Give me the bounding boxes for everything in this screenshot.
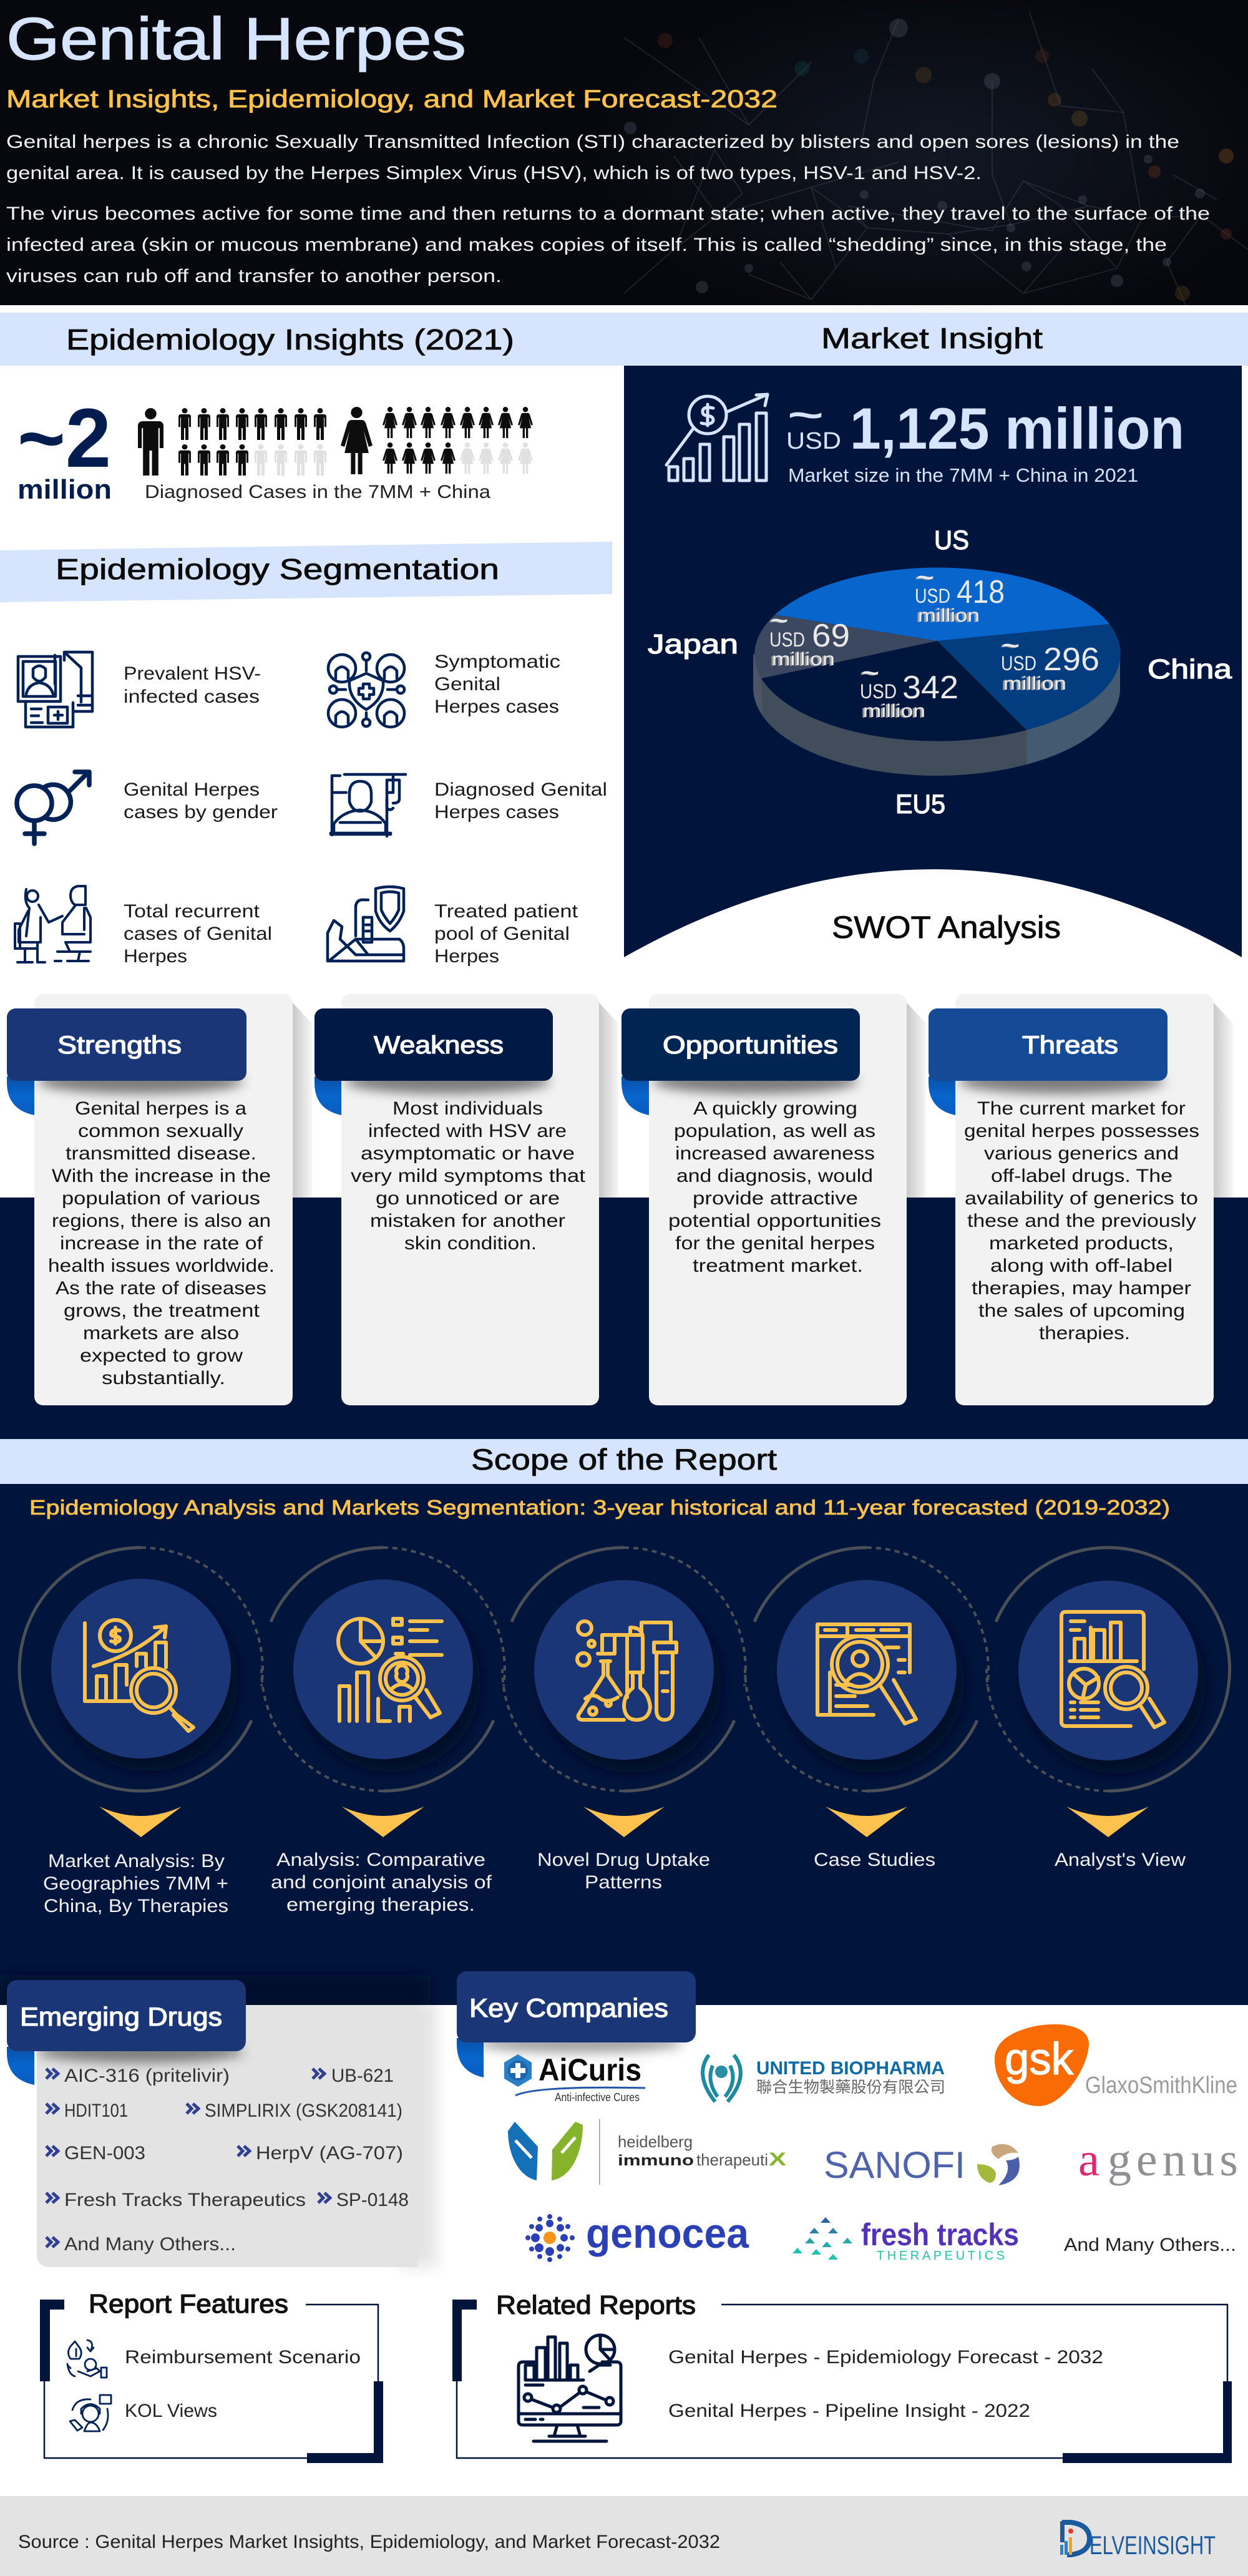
body text: markets are also: [83, 1323, 239, 1344]
header panel: [0, 0, 1248, 331]
panel: related reports: [452, 2290, 1232, 2463]
label: Herpes: [124, 946, 187, 967]
card: strengths: [7, 994, 312, 1405]
label: Prevalent HSV-: [124, 663, 261, 684]
logo: AiCuris: [504, 2052, 645, 2104]
chevron: [1066, 1807, 1149, 1837]
caption: Analysis: Comparative: [276, 1850, 485, 1870]
heading: epidemiology segmentation: Epidemiology Segmentation: [56, 553, 499, 585]
body text: [668, 1098, 881, 1276]
title: Genital Herpes: [6, 6, 466, 72]
icon: chart with magnifier: [85, 1620, 193, 1731]
card: weakness: [314, 994, 618, 1405]
pie label: China value: 296: [1043, 642, 1099, 678]
stat: 2 million diagnosed cases: [17, 392, 533, 505]
icon: patient documents: [18, 652, 92, 727]
label: Symptomatic: [434, 651, 560, 672]
panel: report features: [40, 2289, 383, 2463]
logo: Heidelberg Immuno Therapeutix: [508, 2119, 786, 2185]
logo: Fresh Tracks: fresh tracks: [861, 2217, 1019, 2252]
tab: [622, 1008, 860, 1081]
icon: lab flasks: [577, 1621, 676, 1720]
body text: Most individuals: [392, 1098, 543, 1119]
caption: Analyst's View: [1055, 1850, 1186, 1870]
body text: Genital herpes is a: [75, 1098, 246, 1119]
body text: [48, 1098, 275, 1388]
body text: population of various: [62, 1188, 260, 1209]
heading: Report Features: [89, 2289, 288, 2318]
drug list: GEN-003: [64, 2143, 145, 2164]
body text: With the increase in the: [52, 1166, 271, 1186]
body text: expected to grow: [80, 1345, 243, 1366]
drug list: And Many Others...: [64, 2234, 236, 2255]
body text: [351, 1098, 586, 1254]
body text: substantially.: [102, 1368, 225, 1388]
text: reimbursement scenario: Reimbursement Scenario: [125, 2347, 361, 2368]
region labels: [648, 525, 1232, 819]
region labels: US: [934, 525, 969, 555]
logo: Genocea: genocea: [586, 2210, 749, 2257]
market size value: ~: [787, 394, 824, 437]
heading: Related Reports: [496, 2290, 696, 2320]
segmentation item: prevalent: [18, 652, 261, 727]
body text: grows, the treatment: [64, 1300, 260, 1321]
market size caption: Market size in the 7MM + China in 2021: [788, 464, 1138, 486]
body text: health issues worldwide.: [48, 1256, 275, 1276]
card: threats: [929, 994, 1233, 1405]
logo: Heidelberg Immuno Therapeutix: therapeuti: [696, 2150, 768, 2169]
logo: GSK: [995, 2024, 1237, 2106]
label: infected cases: [124, 686, 260, 707]
intro paragraph 2: infected area (skin or mucous membrane) and makes copies of itself. This is called “shedding” since, in this stage, the: [6, 235, 1167, 255]
segmentation item: symptomatic: [328, 651, 560, 727]
pie chart: market size by region: [753, 565, 1121, 776]
caption: [537, 1850, 710, 1893]
panel: emerging drugs: [0, 1975, 437, 2267]
body text: mistaken for another: [370, 1211, 565, 1231]
icon: monitor analytics: [519, 2335, 621, 2441]
label: cases by gender: [124, 802, 278, 822]
intro paragraph 1: [6, 132, 1179, 183]
label: cases of Genital: [124, 924, 272, 944]
body text: The current market for: [977, 1098, 1186, 1119]
label: Genital Herpes: [124, 779, 260, 800]
pie label: Japan value: 69: [812, 618, 850, 654]
body text: provide attractive: [693, 1188, 858, 1209]
body text: As the rate of diseases: [56, 1278, 266, 1299]
body text: regions, there is also an: [52, 1211, 271, 1231]
heading: market insight: Market Insight: [821, 322, 1043, 354]
drug list: SP-0148: [336, 2190, 409, 2210]
drug list: HDIT101: [64, 2100, 128, 2121]
segmentation item: gender: [17, 772, 278, 844]
caption: Case Studies: [814, 1850, 935, 1870]
logo: Heidelberg Immuno Therapeutix: immuno: [618, 2152, 694, 2169]
big number: ~2: [17, 392, 111, 485]
subtitle: Market Insights, Epidemiology, and Market Forecast-2032: [6, 85, 778, 113]
text: KOL views: KOL Views: [125, 2401, 217, 2421]
icon: tablet report: [1061, 1612, 1164, 1727]
caption: China, By Therapies: [44, 1896, 228, 1916]
scope item: comparative analysis: [261, 1548, 505, 1915]
pie label: US value: million: [918, 605, 980, 626]
logo: Fresh Tracks: THERAPEUTICS: [877, 2249, 1005, 2263]
logo: Heidelberg Immuno Therapeutix: heidelberg: [618, 2132, 693, 2151]
panel: key companies: [457, 1971, 1238, 2263]
tab: [929, 1008, 1168, 1081]
body text: various generics and: [984, 1143, 1179, 1164]
pie label: EU5 value: [860, 660, 958, 721]
heading: epidemiology insights: Epidemiology Insights (2021): [66, 323, 514, 356]
drug list: SIMPLIRIX (GSK208141): [205, 2100, 402, 2121]
tab label: Emerging Drugs: [20, 2002, 222, 2031]
icon: market growth: [666, 394, 768, 481]
caption: Novel Drug Uptake: [537, 1850, 710, 1870]
body text: off-label drugs. The: [991, 1166, 1172, 1186]
intro paragraph 2: viruses can rub off and transfer to another person.: [6, 266, 502, 286]
drug list: HerpV (AG-707): [256, 2143, 403, 2164]
tab label: Threats: [1022, 1032, 1118, 1059]
logo: Agenus: a: [1078, 2134, 1099, 2186]
icon: shield and people: [328, 653, 404, 727]
pie label: US value: [915, 565, 1005, 626]
chevron: [826, 1807, 907, 1837]
icon: gender symbols: [17, 772, 89, 844]
logo: United Biopharma: [703, 2055, 945, 2102]
pie label: US value: ~: [917, 565, 934, 591]
tab: [457, 1971, 696, 2042]
label: [124, 901, 272, 967]
panel: scope of the report: [0, 1439, 1248, 2005]
label: Herpes cases: [434, 802, 559, 822]
heading: scope of the report: Scope of the Report: [471, 1443, 777, 1476]
footer: [0, 2496, 1248, 2576]
caption: and conjoint analysis of: [271, 1872, 492, 1893]
pie label: China value: [1001, 633, 1099, 694]
body text: asymptomatic or have: [361, 1143, 575, 1164]
label: Diagnosed Genital: [434, 779, 607, 800]
pie label: Japan value: ~: [771, 608, 788, 634]
body text: increased awareness: [675, 1143, 875, 1164]
body text: common sexually: [78, 1121, 243, 1141]
caption: Geographies 7MM +: [43, 1873, 228, 1894]
card: opportunities: [622, 994, 926, 1405]
body text: along with off-label: [990, 1256, 1172, 1276]
label: [124, 779, 278, 822]
body text: genital herpes possesses: [964, 1121, 1199, 1141]
body text: treatment market.: [693, 1256, 863, 1276]
label: [124, 663, 261, 707]
section header band: epidemiology and market insight: [0, 313, 1248, 366]
tab label: Key Companies: [469, 1993, 668, 2022]
caption: Market Analysis: By: [48, 1851, 225, 1871]
icon: shield and reclining patient: [328, 887, 404, 961]
source text: Source : Genital Herpes Market Insights, Epidemiology, and Market Forecast-2032: [18, 2532, 720, 2552]
heading: SWOT analysis: SWOT Analysis: [832, 910, 1061, 945]
logo: Heidelberg Immuno Therapeutix: X: [769, 2149, 786, 2170]
pictogram: men: [138, 408, 326, 476]
label: Herpes: [434, 946, 499, 967]
body text: these and the previously: [967, 1211, 1196, 1231]
body text: very mild symptoms that: [351, 1166, 586, 1186]
body text: potential opportunities: [668, 1211, 881, 1231]
label: Genital: [434, 674, 500, 695]
body text: [964, 1098, 1199, 1344]
chevron: [99, 1807, 182, 1837]
subheading: forecast period: Epidemiology Analysis and Markets Segmentation: 3-year historical and 11-year forecasted (2019-2032): [29, 1496, 1170, 1519]
region labels: EU5: [895, 789, 945, 819]
tab label: Opportunities: [663, 1032, 838, 1059]
caption: emerging therapies.: [286, 1895, 475, 1915]
segmentation item: diagnosed: [331, 774, 607, 836]
region labels: Japan: [648, 629, 738, 660]
icon: doctor and patient: [15, 886, 90, 962]
tab: [7, 1008, 246, 1081]
text: related report 2: Genital Herpes - Pipeline Insight - 2022: [668, 2401, 1030, 2421]
label: Herpes cases: [434, 696, 559, 717]
panel: SWOT navy background: [0, 1198, 1248, 1439]
tab: [314, 1008, 553, 1081]
pie label: Japan value: million: [772, 649, 835, 670]
scope item: market analysis: [19, 1548, 263, 1916]
body text: population, as well as: [674, 1121, 875, 1141]
scope item: case studies: [745, 1548, 988, 1870]
pie label: US value: 418: [957, 574, 1005, 610]
logo: Sanofi: SANOFI: [824, 2144, 965, 2186]
logo: Genocea: [525, 2210, 749, 2262]
body text: infected with HSV are: [368, 1121, 567, 1141]
label: [434, 779, 607, 822]
text: related report 1: Genital Herpes - Epidemiology Forecast - 2032: [668, 2347, 1103, 2368]
body text: increase in the rate of: [60, 1233, 263, 1254]
scope item: analyst view: [987, 1548, 1230, 1870]
pie label: EU5 value: 342: [902, 670, 958, 706]
logo: AiCuris: Anti-infective Cures: [555, 2091, 640, 2104]
body text: skin condition.: [404, 1233, 537, 1254]
pie label: EU5 value: ~: [862, 660, 879, 686]
icon: KOL views: [70, 2395, 111, 2431]
icon: browser with magnifier: [817, 1624, 916, 1724]
segmentation item: treated: [328, 887, 578, 967]
body text: A quickly growing: [693, 1098, 857, 1119]
label: pool of Genital: [434, 924, 570, 944]
million label: million: [17, 474, 112, 505]
body text: for the genital herpes: [675, 1233, 875, 1254]
body text: and diagnosis, would: [676, 1166, 873, 1186]
market size value: USD: [786, 428, 841, 454]
pie label: US value: USD: [915, 585, 950, 607]
caption: [271, 1850, 492, 1915]
drug list: UB-621: [331, 2066, 394, 2086]
logo: DelveInsight: [1060, 2521, 1216, 2560]
market size value: 1,125 million: [850, 396, 1184, 461]
intro paragraph 2: [6, 203, 1210, 286]
drug list: [46, 2066, 409, 2255]
label: [434, 901, 578, 967]
region labels: China: [1148, 654, 1232, 685]
scope item: novel drug uptake: [502, 1548, 746, 1893]
icon: pie and bars with magnifier: [338, 1619, 442, 1721]
logo: AiCuris: AiCuris: [539, 2052, 641, 2087]
pie label: China value: USD: [1001, 652, 1036, 675]
pictogram: women: [341, 407, 533, 474]
icon: patient in bed: [331, 774, 406, 836]
body text: availability of generics to: [965, 1188, 1198, 1209]
label: Total recurrent: [124, 901, 260, 922]
intro paragraph 1: Genital herpes is a chronic Sexually Transmitted Infection (STI) characterized by blisters and open sores (lesions) in the: [6, 132, 1179, 152]
chevron: [342, 1807, 424, 1837]
heading: epidemiology segmentation: [0, 542, 612, 602]
logo: Fresh Tracks: [792, 2217, 1019, 2263]
intro paragraph 1: genital area. It is caused by the Herpes Simplex Virus (HSV), which is of two types, HSV-1 and HSV-2.: [6, 163, 982, 183]
drug list: Fresh Tracks Therapeutics: [64, 2190, 306, 2210]
body text: the sales of upcoming: [978, 1300, 1185, 1321]
tab: [7, 1980, 246, 2051]
logo: Agenus: genus: [1108, 2134, 1238, 2186]
panel: market insight: [624, 366, 1242, 957]
body text: go unnoticed or are: [376, 1188, 560, 1209]
logo: United Biopharma: 聯合生物製藥股份有限公司: [756, 2079, 945, 2096]
pie label: China value: million: [1003, 673, 1066, 694]
caption: Patterns: [585, 1872, 662, 1893]
label: Treated patient: [434, 901, 578, 922]
intro paragraph 2: The virus becomes active for some time and then returns to a dormant state; when active, they travel to the surface of the: [6, 203, 1210, 224]
body text: marketed products,: [989, 1233, 1174, 1254]
pie label: Japan value: USD: [769, 628, 805, 651]
drug list: AIC-316 (pritelivir): [64, 2066, 230, 2086]
logo: GSK: gsk: [1005, 2034, 1074, 2084]
label: [434, 651, 560, 717]
tab label: Strengths: [57, 1032, 182, 1059]
pie label: EU5 value: USD: [860, 680, 897, 703]
pie label: Japan value: [769, 608, 850, 670]
note: and many others: And Many Others...: [1064, 2235, 1236, 2255]
segmentation item: recurrent: [15, 886, 272, 967]
pie label: China value: ~: [1002, 633, 1020, 659]
body text: therapies, may hamper: [972, 1278, 1191, 1299]
icon: reimbursement: [67, 2340, 107, 2378]
tab label: Weakness: [374, 1032, 504, 1059]
pie label: EU5 value: million: [863, 701, 925, 721]
body text: therapies.: [1039, 1323, 1130, 1344]
caption: [43, 1851, 228, 1916]
caption: Diagnosed Cases in the 7MM + China: [145, 482, 490, 502]
logo: United Biopharma: UNITED BIOPHARMA: [756, 2058, 945, 2079]
body text: transmitted disease.: [66, 1143, 256, 1164]
chevron: [583, 1807, 665, 1837]
